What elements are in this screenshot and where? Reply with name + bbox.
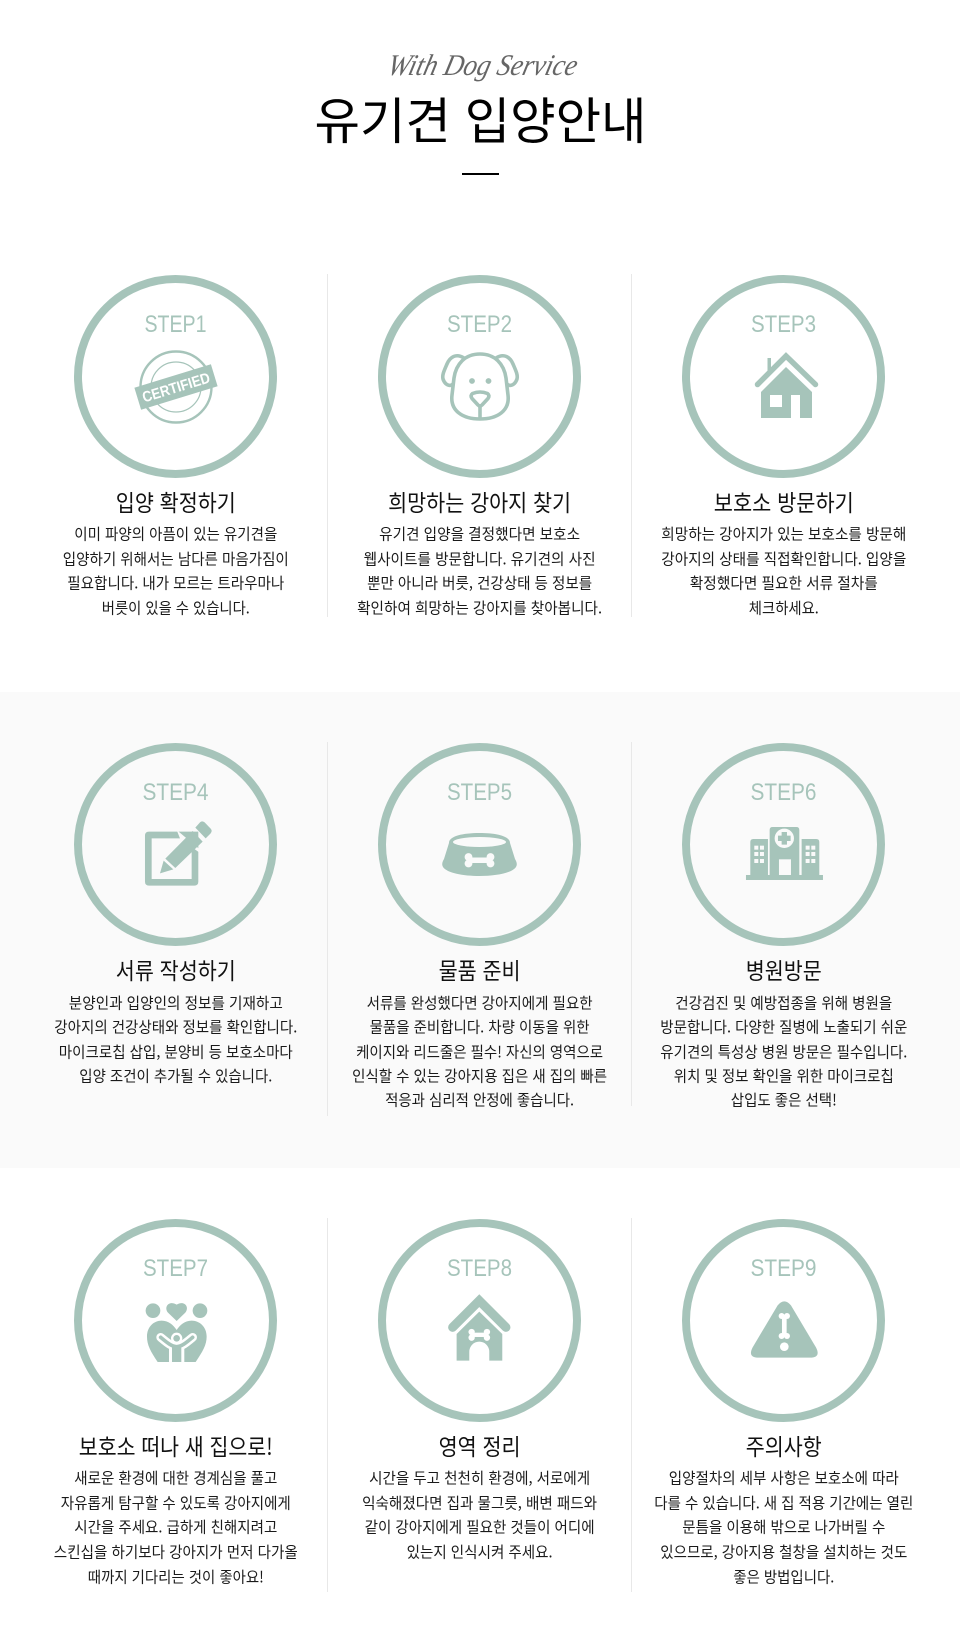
step 1 text: 입양하기 위해서는 남다른 마음가짐이 (63, 548, 289, 570)
panel: step 3 (661, 279, 906, 618)
panel: step 2 (357, 279, 602, 618)
step 4 heading: 서류 작성하기 (116, 952, 236, 986)
step 9 text: 다를 수 있습니다. 새 집 적용 기간에는 열린 (654, 1492, 913, 1514)
title underline (462, 173, 499, 175)
step 5 text: 물품을 준비합니다. 차량 이동을 위한 (370, 1016, 590, 1038)
step 7 text (54, 1466, 298, 1588)
step 5 text (352, 992, 607, 1110)
step 2 text (357, 522, 602, 618)
step 7 text: 때까지 기다리는 것이 좋아요! (88, 1566, 264, 1588)
step 2 ring (382, 279, 577, 474)
step 9 text (654, 1466, 913, 1588)
step 9 text: 문틈을 이용해 밖으로 나가버릴 수 (682, 1516, 885, 1538)
step 3 ring (686, 279, 881, 474)
step 9 text: 있으므로, 강아지용 철창을 설치하는 것도 (660, 1540, 907, 1562)
step 2 text: 확인하여 희망하는 강아지를 찾아봅니다. (357, 596, 602, 618)
step 5 text: 인식할 수 있는 강아지용 집은 새 집의 빠른 (352, 1064, 607, 1086)
panel: step 7 (54, 1223, 298, 1588)
step 4 text: 마이크로칩 삽입, 분양비 등 보호소마다 (59, 1040, 293, 1062)
step 2 text: 뿐만 아니라 버릇, 건강상태 등 정보를 (367, 572, 592, 594)
step 7 text: 새로운 환경에 대한 경계심을 풀고 (74, 1466, 277, 1488)
step 3 text: 확정했다면 필요한 서류 절차를 (690, 572, 878, 594)
panel: step 8 (362, 1223, 597, 1562)
step 8 text: 익숙해졌다면 집과 물그릇, 배변 패드와 (362, 1492, 597, 1514)
step 6 text (660, 992, 907, 1110)
icon: certified stamp: CERTIFIED (140, 370, 212, 406)
step 3 text: 체크하세요. (749, 596, 819, 618)
panel: step 9 (654, 1223, 913, 1588)
step 4 text: 입양 조건이 추가될 수 있습니다. (79, 1064, 272, 1086)
step 1 text: 필요합니다. 내가 모르는 트라우마나 (67, 572, 284, 594)
step 5 text: 케이지와 리드줄은 필수! 자신의 영역으로 (356, 1040, 603, 1062)
script subtitle: With Dog Service (384, 48, 582, 82)
icon: house (758, 356, 816, 418)
panel: step 6 (660, 747, 907, 1110)
step 5 label: STEP5 (447, 779, 512, 806)
step 6 text: 건강검진 및 예방접종을 위해 병원을 (675, 992, 892, 1014)
step 8 text (362, 1466, 597, 1562)
step 7 label: STEP7 (143, 1255, 208, 1282)
step 4 text: 분양인과 입양인의 정보를 기재하고 (69, 992, 283, 1014)
header (314, 48, 646, 175)
step 8 heading: 영역 정리 (439, 1428, 521, 1462)
step 6 heading: 병원방문 (746, 952, 822, 986)
step 7 text: 시간을 주세요. 급하게 친해지려고 (74, 1516, 277, 1538)
step 8 text: 같이 강아지에게 필요한 것들이 어디에 (365, 1516, 595, 1538)
step 1 heading: 입양 확정하기 (116, 484, 236, 518)
step 1 ring (78, 279, 273, 474)
step 4 text (54, 992, 297, 1086)
step 1 label: STEP1 (144, 311, 206, 338)
step 9 ring (686, 1223, 881, 1418)
step 7 heading: 보호소 떠나 새 집으로! (79, 1428, 273, 1462)
step 7 ring (78, 1223, 273, 1418)
step 9 text: 좋은 방법입니다. (733, 1566, 834, 1588)
icon: family and heart (146, 1303, 207, 1362)
title: 유기견 입양안내 (314, 82, 646, 154)
step 6 ring (686, 747, 881, 942)
step 6 text: 위치 및 정보 확인을 위한 마이크로칩 (674, 1064, 894, 1086)
step 1 text: 이미 파양의 아픔이 있는 유기견을 (74, 522, 277, 544)
step 1 text (63, 522, 289, 618)
step 8 text: 있는지 인식시켜 주세요. (407, 1540, 553, 1562)
step 2 heading: 희망하는 강아지 찾기 (388, 484, 571, 518)
step 4 text: 강아지의 건강상태와 정보를 확인합니다. (54, 1016, 297, 1038)
step 8 label: STEP8 (447, 1255, 512, 1282)
icon: hospital (746, 827, 823, 880)
panel: step 5 (352, 747, 607, 1110)
step 5 text: 적응과 심리적 안정에 좋습니다. (385, 1088, 574, 1110)
panel: step 1 (63, 279, 289, 618)
step 9 text: 입양절차의 세부 사항은 보호소에 따라 (669, 1466, 899, 1488)
step 7 text: 스킨십을 하기보다 강아지가 먼저 다가올 (54, 1540, 298, 1562)
step 5 heading: 물품 준비 (439, 952, 521, 986)
step 8 text: 시간을 두고 천천히 환경에, 서로에게 (369, 1466, 590, 1488)
step 4 ring (78, 747, 273, 942)
step 6 text: 방문합니다. 다양한 질병에 노출되기 쉬운 (660, 1016, 907, 1038)
step 4 label: STEP4 (142, 779, 208, 806)
step 1 text: 버릇이 있을 수 있습니다. (102, 596, 250, 618)
step 3 text: 강아지의 상태를 직접확인합니다. 입양을 (661, 548, 906, 570)
step 6 text: 삽입도 좋은 선택! (731, 1088, 837, 1110)
icon: dog house (453, 1301, 506, 1361)
step 2 text: 웹사이트를 방문합니다. 유기견의 사진 (364, 548, 596, 570)
step 7 text: 자유롭게 탐구할 수 있도록 강아지에게 (61, 1492, 291, 1514)
step 3 text: 희망하는 강아지가 있는 보호소를 방문해 (661, 522, 906, 544)
icon: certified stamp (134, 352, 218, 422)
step 9 label: STEP9 (750, 1255, 816, 1282)
step 6 text: 유기견의 특성상 병원 방문은 필수입니다. (660, 1040, 907, 1062)
icon: dog face (443, 354, 517, 419)
icon: form and pencil (145, 821, 212, 886)
step 5 ring (382, 747, 577, 942)
step 2 text: 유기견 입양을 결정했다면 보호소 (379, 522, 580, 544)
icon: warning triangle with bone (751, 1301, 818, 1358)
step 9 heading: 주의사항 (746, 1428, 822, 1462)
step 5 text: 서류를 완성했다면 강아지에게 필요한 (367, 992, 593, 1014)
step 3 text (661, 522, 906, 618)
step 2 label: STEP2 (447, 311, 512, 338)
step 6 label: STEP6 (750, 779, 816, 806)
step 3 label: STEP3 (751, 311, 816, 338)
icon: dog bowl (442, 833, 517, 876)
step 8 ring (382, 1223, 577, 1418)
step 3 heading: 보호소 방문하기 (714, 484, 854, 518)
panel: step 4 (54, 747, 297, 1086)
